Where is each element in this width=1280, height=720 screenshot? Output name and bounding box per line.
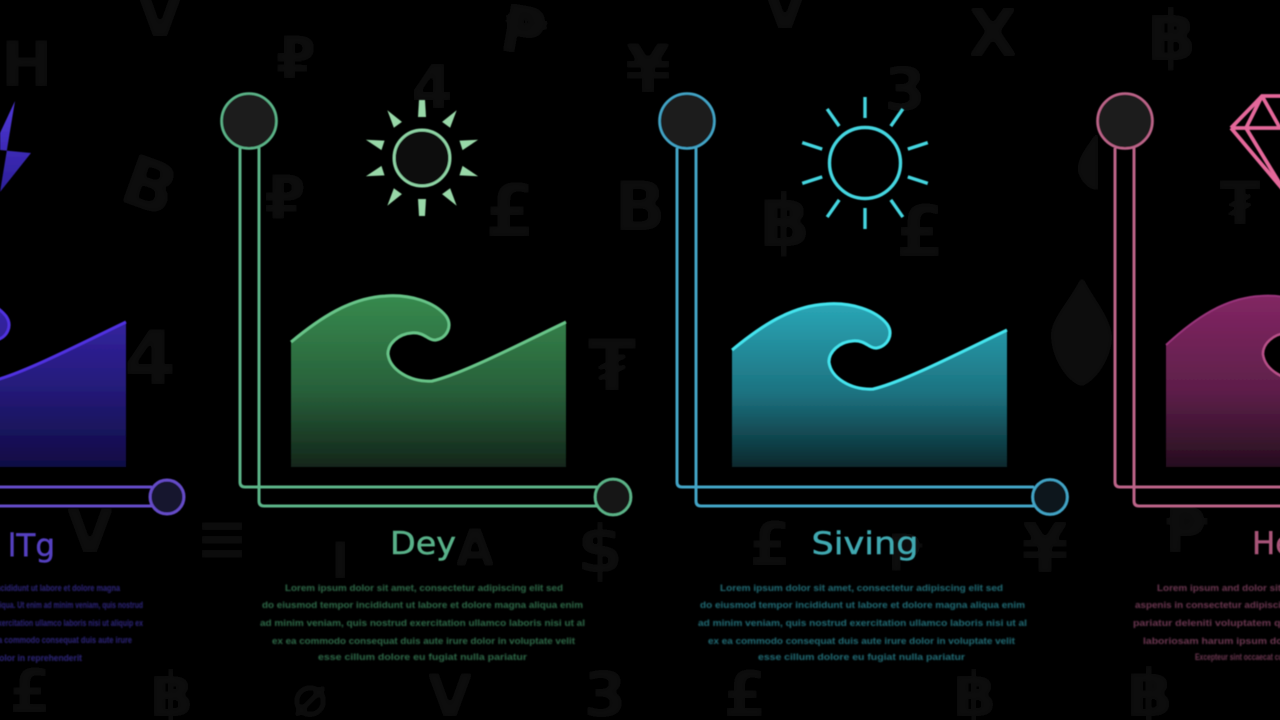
wave: cyan bbox=[732, 304, 1007, 467]
icon: pink diamond bbox=[1231, 96, 1280, 192]
description: purple bbox=[0, 583, 144, 664]
heading: Siving: Siving bbox=[812, 526, 918, 562]
background: faint currency symbols: 4 bbox=[411, 53, 453, 123]
background: faint currency symbols: ₱ bbox=[1164, 494, 1208, 567]
background: faint currency symbols: ₽ bbox=[264, 163, 306, 233]
description: cyan bbox=[698, 583, 1027, 663]
background: faint currency symbols: ₽ bbox=[276, 24, 316, 92]
background: faint currency symbols: ₮ bbox=[588, 325, 636, 407]
description: green: ex ea commodo consequat duis aute irure dolor in voluptate velit bbox=[272, 636, 576, 647]
panel: purple (left, cropped) bbox=[0, 101, 184, 514]
background: faint currency symbols: ₮ bbox=[1219, 169, 1261, 239]
description: cyan: do eiusmod tempor incididunt ut labore et dolore magna aliqua enim bbox=[700, 600, 1025, 611]
connector frame: green bbox=[222, 94, 631, 515]
connector frame: cyan bbox=[660, 94, 1068, 514]
panel: green Day bbox=[222, 94, 631, 515]
connector frame: purple bbox=[0, 480, 184, 514]
icon: green sun bbox=[364, 100, 480, 216]
background: faint currency symbols: A bbox=[456, 519, 495, 577]
description: purple: exercitation ullamco laboris nisi ut aliquip ex bbox=[0, 618, 144, 629]
background: faint currency symbols: ₱ bbox=[888, 524, 923, 582]
description: cyan: Lorem ipsum dolor sit amet, consectetur adipiscing elit sed bbox=[720, 583, 1003, 594]
connector frame: pink bbox=[1098, 94, 1280, 506]
wave: green bbox=[291, 296, 566, 467]
description: cyan: ad minim veniam, quis nostrud exercitation ullamco laboris nisi ut al bbox=[698, 618, 1027, 629]
wave: purple bbox=[0, 296, 126, 467]
description: green: esse cillum dolore eu fugiat nulla pariatur bbox=[318, 652, 527, 663]
background: faint currency symbols: £ bbox=[485, 169, 535, 253]
background: faint currency symbols: £ bbox=[896, 191, 944, 273]
description: green bbox=[260, 583, 585, 663]
background: faint currency symbols: ¥ bbox=[625, 31, 671, 108]
icon: cyan sun bbox=[802, 97, 928, 229]
description: pink bbox=[1133, 583, 1280, 663]
background: faint currency symbols: $ bbox=[577, 511, 623, 588]
wave: pink bbox=[1166, 296, 1280, 467]
panel: cyan Siving bbox=[660, 94, 1068, 514]
background: faint currency symbols: ≡ bbox=[195, 502, 249, 576]
heading: purple: lTg bbox=[8, 528, 55, 564]
description: green: do eiusmod tempor incididunt ut labore et dolore magna aliqua enim bbox=[262, 600, 583, 611]
background: faint currency symbols: B bbox=[111, 138, 189, 234]
description: green: ad minim veniam, quis nostrud exercitation ullamco laboris nisi ut al bbox=[260, 618, 585, 629]
background: faint currency symbols: V bbox=[67, 497, 114, 567]
description: cyan: ex ea commodo consequat duis aute irure dolor in voluptate velit bbox=[708, 636, 1016, 647]
background: faint currency symbols: I bbox=[331, 532, 349, 590]
description: green: Lorem ipsum dolor sit amet, consectetur adipiscing elit sed bbox=[285, 583, 563, 594]
icon: lightning bolt bbox=[0, 101, 31, 192]
description: purple: aliqua. Ut enim ad minim veniam, quis nostrud bbox=[0, 600, 143, 611]
background: faint currency symbols: ฿ bbox=[760, 179, 810, 263]
background: faint currency symbols: H bbox=[1, 28, 53, 101]
background: faint currency symbols: £ bbox=[749, 510, 791, 580]
panel: pink (right, cropped) bbox=[1098, 94, 1280, 506]
heading: Dey: Dey bbox=[390, 526, 456, 562]
background: faint currency symbols: 4 bbox=[124, 316, 176, 402]
description: cyan: esse cillum dolore eu fugiat nulla pariatur bbox=[758, 652, 965, 663]
background: faint currency symbols: B bbox=[614, 168, 666, 247]
background: faint currency symbols: 3 bbox=[884, 55, 926, 125]
background: faint currency symbols: ¥ bbox=[1021, 510, 1069, 589]
